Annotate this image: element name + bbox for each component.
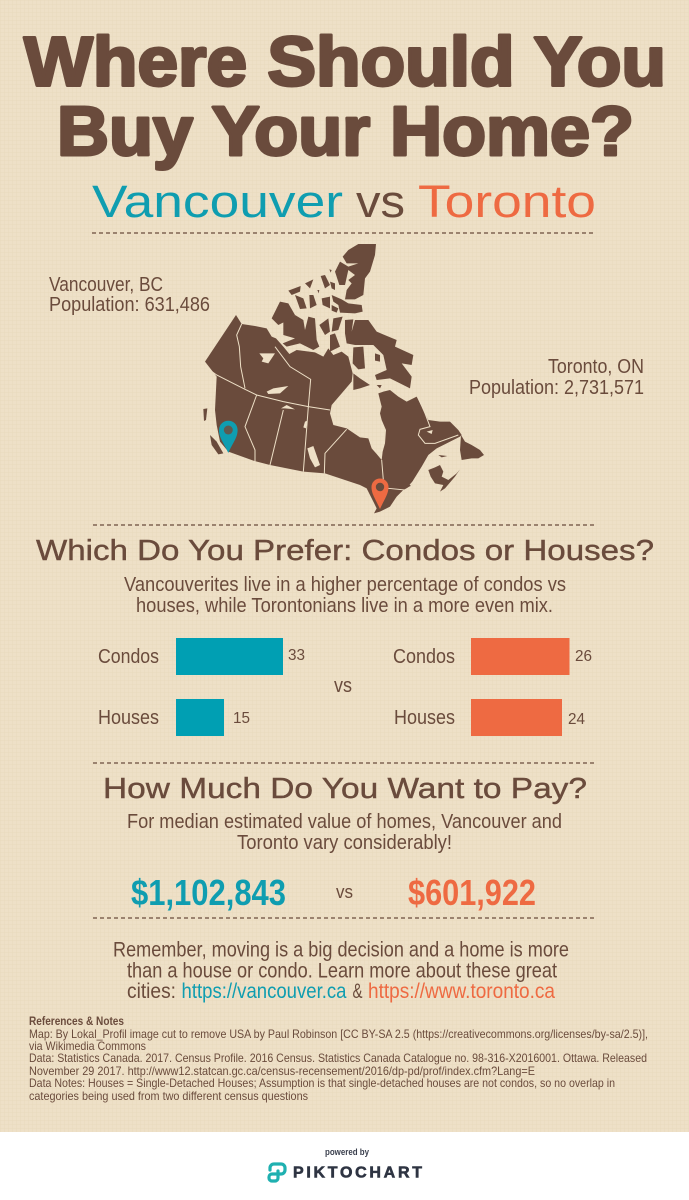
bar chart: Vancouver bbox=[98, 638, 305, 736]
references and notes: November 29 2017. http://www12.statcan.gc.ca/census-recensement/2016/dp-pd/prof/index.cfm?Lang=E bbox=[29, 1064, 535, 1078]
bar chart: Toronto: Condos bbox=[393, 646, 455, 668]
references and notes: categories being used from two different census questions bbox=[29, 1089, 308, 1103]
bar chart: Toronto: 26 bbox=[575, 648, 592, 665]
text: price intro: Toronto vary considerably! bbox=[237, 832, 452, 854]
province borders bbox=[207, 324, 458, 490]
label: Vancouver population: Population: 631,486 bbox=[49, 294, 210, 316]
bar chart: Toronto: 24 bbox=[568, 711, 585, 728]
heading: price: How Much Do You Want to Pay? bbox=[103, 773, 587, 805]
title: Where Should You bbox=[24, 22, 666, 100]
footer: powered by Piktochart bbox=[0, 1132, 689, 1200]
text: closing message: & bbox=[352, 980, 362, 1003]
text: vs: vs bbox=[336, 882, 353, 902]
title: Buy Your Home? bbox=[57, 92, 634, 170]
bar chart: Toronto: Houses bbox=[394, 707, 455, 729]
heading: condos or houses: Which Do You Prefer: Condos or Houses? bbox=[36, 535, 654, 567]
bar chart: Vancouver: Houses bbox=[98, 707, 159, 729]
bar chart: Vancouver: 15 bbox=[233, 710, 250, 727]
atlantic provinces bbox=[428, 435, 484, 492]
stat: Vancouver price: $1,102,843 bbox=[131, 872, 286, 913]
label: Toronto population: Population: 2,731,571 bbox=[469, 377, 644, 399]
label: Toronto population bbox=[469, 356, 644, 399]
text: condos intro bbox=[124, 574, 566, 617]
references and notes: Data Notes: Houses = Single-Detached Houses; Assumption is that single-detached houses are not condos, so no overlap in bbox=[29, 1076, 615, 1090]
text: condos intro: Vancouverites live in a higher percentage of condos vs bbox=[124, 574, 566, 596]
icon: Toronto map pin bbox=[372, 478, 388, 509]
text: vs: vs bbox=[334, 675, 352, 697]
footer: powered by Piktochart: powered by bbox=[325, 1147, 370, 1158]
subtitle: Vancouver vs Toronto: vs bbox=[356, 176, 405, 227]
text: condos intro: houses, while Torontonians live in a more even mix. bbox=[136, 595, 553, 617]
bar chart: Toronto bbox=[393, 638, 592, 736]
text: closing message: https://www.toronto.ca bbox=[368, 980, 555, 1003]
lakes bbox=[259, 353, 433, 467]
arctic islands bbox=[283, 244, 413, 390]
subtitle: Vancouver vs Toronto: Toronto bbox=[418, 176, 596, 227]
references and notes bbox=[29, 1014, 648, 1103]
text: closing message: https://vancouver.ca bbox=[182, 980, 347, 1003]
bar chart: Vancouver: Condos bbox=[98, 646, 159, 668]
stat: Toronto price: $601,922 bbox=[408, 872, 536, 913]
text: price intro: For median estimated value of homes, Vancouver and bbox=[127, 811, 562, 833]
bar chart: Vancouver: 33 bbox=[288, 647, 305, 664]
label: Vancouver population: Vancouver, BC bbox=[49, 274, 163, 296]
icon: Vancouver map pin bbox=[219, 421, 238, 453]
subtitle: Vancouver vs Toronto: Vancouver bbox=[92, 176, 343, 227]
references and notes: References & Notes bbox=[29, 1014, 124, 1028]
text: closing message: cities: bbox=[127, 980, 176, 1003]
footer: powered by Piktochart: PIKTOCHART bbox=[293, 1164, 422, 1182]
title bbox=[24, 22, 666, 170]
subtitle: Vancouver vs Toronto bbox=[92, 176, 596, 227]
map of Canada bbox=[203, 244, 484, 513]
text: price intro bbox=[127, 811, 562, 854]
text: closing message: Remember, moving is a big decision and a home is more bbox=[113, 938, 569, 962]
text: closing message: than a house or condo. Learn more about these great bbox=[127, 960, 557, 982]
label: Toronto population: Toronto, ON bbox=[548, 356, 644, 378]
label: Vancouver population bbox=[49, 274, 210, 316]
text: closing message bbox=[113, 938, 569, 1003]
references and notes: via Wikimedia Commons bbox=[29, 1039, 146, 1053]
